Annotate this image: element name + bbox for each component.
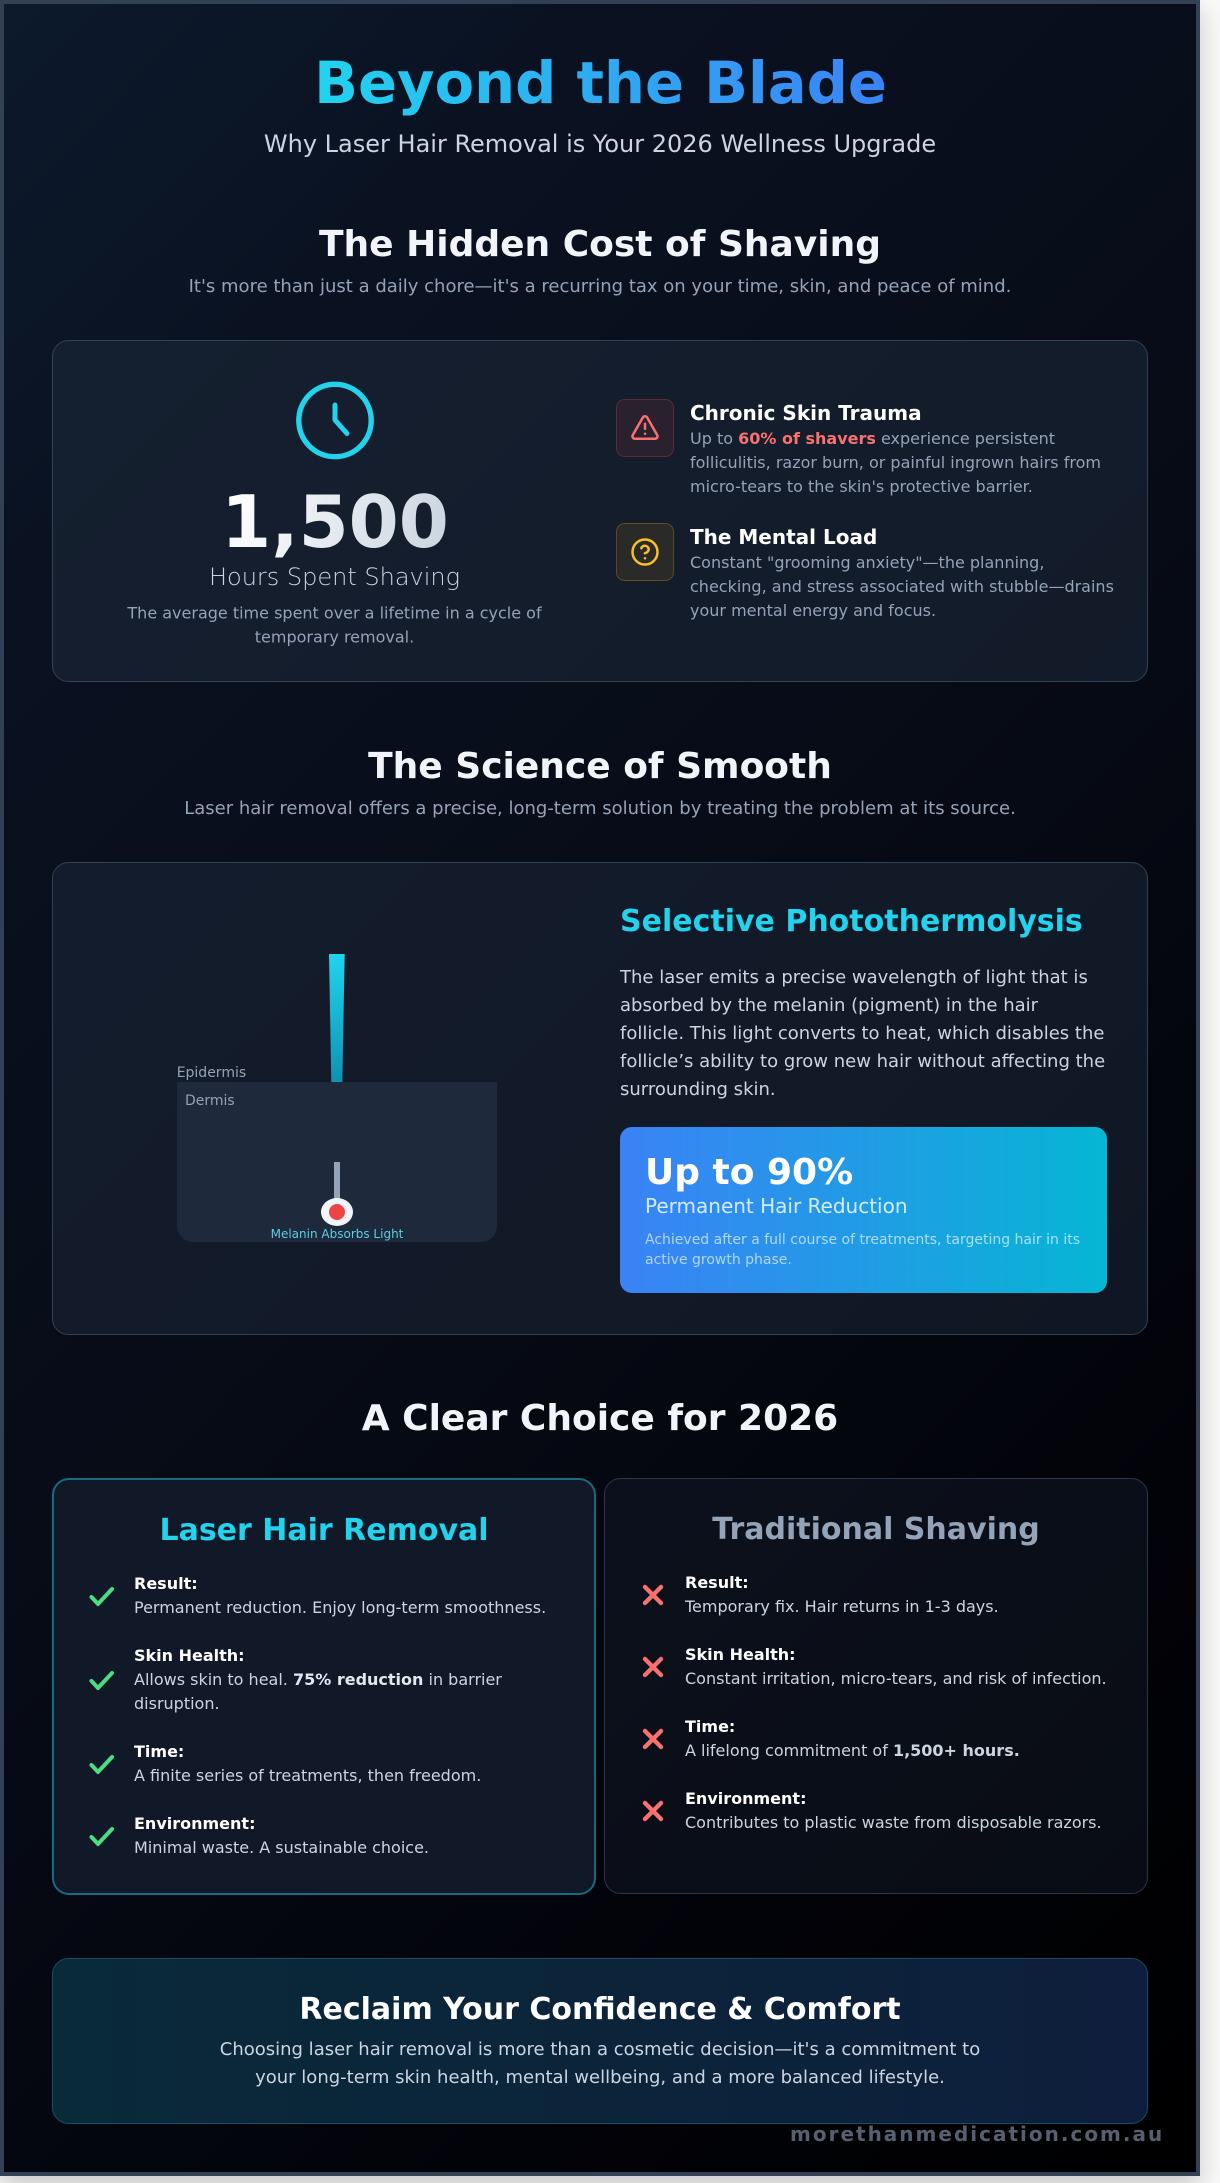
panel: laser hair removal bbox=[53, 1479, 595, 1894]
block: the mental load: your mental energy and focus. bbox=[690, 601, 936, 620]
block: the mental load: checking, and stress associated with stubble—drains bbox=[690, 577, 1114, 596]
stat description: The average time spent over a lifetime in a cycle of bbox=[126, 604, 542, 622]
callout: up to 90%: Up to 90% bbox=[645, 1152, 853, 1193]
heading: selective photothermolysis: Selective Photothermolysis bbox=[620, 904, 1083, 939]
row: skin health: disruption. bbox=[134, 1694, 220, 1713]
row: result: Permanent reduction. Enjoy long-term smoothness. bbox=[134, 1598, 546, 1617]
row: skin health: Allows skin to heal. 75% reduction in barrier bbox=[134, 1670, 502, 1689]
stat label: Hours Spent Shaving bbox=[209, 563, 460, 591]
heading: laser column: Laser Hair Removal bbox=[159, 1513, 489, 1548]
row: result: Temporary fix. Hair returns in 1-3 days. bbox=[684, 1597, 999, 1616]
panel: science bbox=[52, 862, 1148, 1334]
icon: clock bbox=[299, 384, 371, 457]
closing text: Choosing laser hair removal is more than a cosmetic decision—it's a commitment to bbox=[220, 2039, 980, 2060]
row: result bbox=[645, 1573, 999, 1616]
explanation text: follicle’s ability to grow new hair without affecting the bbox=[620, 1051, 1105, 1072]
panel: traditional shaving bbox=[604, 1478, 1148, 1894]
callout: up to 90%: active growth phase. bbox=[645, 1252, 792, 1268]
row: skin health: Skin Health: bbox=[134, 1646, 245, 1665]
panel: hidden cost bbox=[52, 340, 1148, 682]
callout: up to 90% bbox=[620, 1127, 1107, 1293]
block: chronic skin trauma: Chronic Skin Trauma bbox=[690, 401, 922, 425]
row: environment bbox=[645, 1789, 1102, 1832]
panel: call to action bbox=[52, 1958, 1148, 2124]
hair shaft bbox=[334, 1162, 340, 1202]
block: chronic skin trauma: folliculitis, razor burn, or painful ingrown hairs from bbox=[690, 453, 1101, 472]
row: environment bbox=[92, 1814, 429, 1857]
heading: shaving column: Traditional Shaving bbox=[712, 1512, 1040, 1547]
diagram: skin and laser bbox=[177, 954, 497, 1242]
explanation text: The laser emits a precise wavelength of light that is bbox=[619, 967, 1088, 988]
explanation text: follicle. This light converts to heat, which disables the bbox=[620, 1023, 1104, 1044]
icon: warning bbox=[616, 400, 674, 456]
row: environment: Environment: bbox=[134, 1814, 255, 1833]
label: epidermis: Epidermis bbox=[177, 1065, 246, 1081]
row: skin health: Skin Health: bbox=[685, 1645, 796, 1664]
stat description: temporary removal. bbox=[255, 628, 414, 646]
row: skin health: Constant irritation, micro-tears, and risk of infection. bbox=[685, 1669, 1107, 1688]
callout: up to 90%: Permanent Hair Reduction bbox=[645, 1194, 908, 1218]
block: the mental load: The Mental Load bbox=[690, 525, 877, 549]
explanation text bbox=[619, 967, 1105, 1100]
closing text bbox=[220, 2039, 980, 2088]
row: time: A finite series of treatments, then freedom. bbox=[134, 1766, 481, 1785]
follicle bbox=[321, 1198, 353, 1226]
heading: hidden cost: The Hidden Cost of Shaving bbox=[319, 224, 881, 265]
row: environment: Minimal waste. A sustainable choice. bbox=[134, 1838, 429, 1857]
block: chronic skin trauma bbox=[690, 401, 1101, 496]
row: time bbox=[645, 1717, 1020, 1760]
row: time: Time: bbox=[685, 1717, 735, 1736]
row: time: Time: bbox=[134, 1742, 184, 1761]
row: environment: Environment: bbox=[685, 1789, 806, 1808]
block: the mental load bbox=[690, 525, 1114, 620]
row: result: Result: bbox=[134, 1574, 198, 1593]
icon: question bbox=[616, 524, 674, 580]
row: time bbox=[92, 1742, 481, 1785]
block: chronic skin trauma: Up to 60% of shavers experience persistent bbox=[690, 429, 1055, 448]
explanation text: absorbed by the melanin (pigment) in the hair bbox=[620, 995, 1039, 1016]
row: result bbox=[92, 1574, 546, 1617]
row: skin health bbox=[645, 1645, 1107, 1688]
row: result: Result: bbox=[685, 1573, 749, 1592]
label: melanin: Melanin Absorbs Light bbox=[271, 1227, 404, 1241]
block: chronic skin trauma: micro-tears to the skin's protective barrier. bbox=[690, 477, 1033, 496]
stat description bbox=[126, 604, 542, 646]
big stat: 1,500: 1,500 bbox=[221, 480, 449, 564]
closing text: your long-term skin health, mental wellbeing, and a more balanced lifestyle. bbox=[255, 2067, 945, 2088]
label: dermis: Dermis bbox=[185, 1093, 235, 1109]
row: environment: Contributes to plastic waste from disposable razors. bbox=[685, 1813, 1102, 1832]
explanation text: surrounding skin. bbox=[620, 1079, 776, 1100]
laser beam bbox=[329, 954, 345, 1082]
row: time: A lifelong commitment of 1,500+ hours. bbox=[685, 1741, 1020, 1760]
heading: reclaim: Reclaim Your Confidence & Comfort bbox=[299, 1992, 901, 2027]
text: hidden cost intro: It's more than just a daily chore—it's a recurring tax on your time, skin, and peace of mind. bbox=[189, 276, 1011, 297]
heading: science: The Science of Smooth bbox=[368, 746, 832, 787]
dermis layer bbox=[177, 1082, 497, 1242]
heading: clear choice: A Clear Choice for 2026 bbox=[362, 1398, 838, 1439]
row: skin health bbox=[92, 1646, 502, 1713]
callout: up to 90%: Achieved after a full course of treatments, targeting hair in its bbox=[645, 1232, 1080, 1248]
title: Beyond the Blade bbox=[314, 50, 887, 117]
text: science intro: Laser hair removal offers a precise, long-term solution by treating the problem at its source. bbox=[184, 798, 1016, 819]
subtitle: Why Laser Hair Removal is Your 2026 Wellness Upgrade bbox=[264, 130, 936, 158]
watermark: morethanmedication.com.au bbox=[790, 2122, 1164, 2146]
melanin dot bbox=[329, 1204, 345, 1220]
block: the mental load: Constant "grooming anxiety"—the planning, bbox=[690, 553, 1044, 572]
